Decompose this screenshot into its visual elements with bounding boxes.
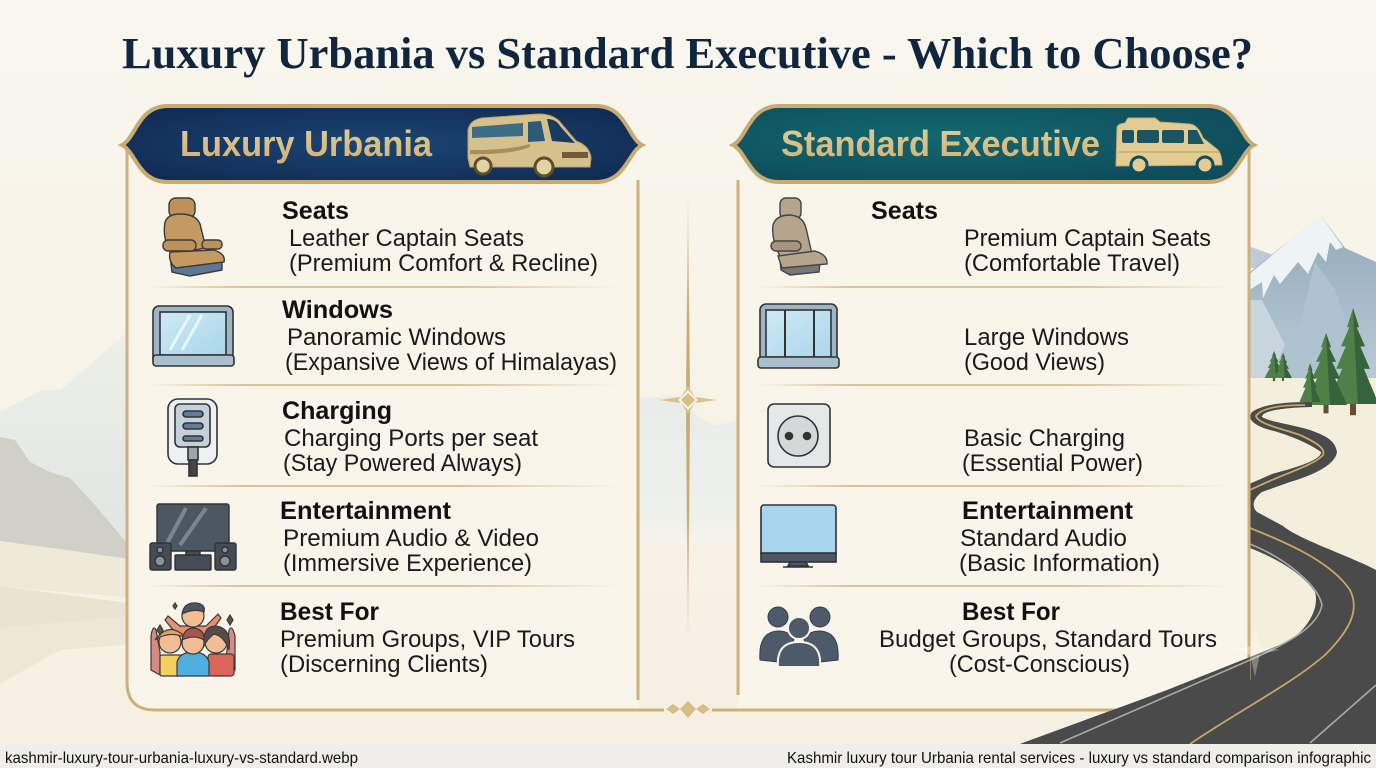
row text (964, 225, 1211, 277)
row text: (Immersive Experience) (283, 550, 532, 577)
row heading: Windows (282, 296, 393, 324)
panel: luxury urbania (122, 106, 664, 710)
row: entertainment (150, 497, 539, 577)
road sparkle (1232, 626, 1280, 677)
row text (280, 626, 575, 678)
row heading: Seats (871, 197, 938, 225)
row: seats (163, 197, 598, 277)
row text (959, 525, 1160, 577)
row text: (Good Views) (964, 349, 1105, 376)
row text: Budget Groups, Standard Tours (879, 626, 1217, 653)
row text: Basic Charging (964, 425, 1125, 452)
row heading: Entertainment (962, 497, 1134, 525)
panel body (738, 150, 1249, 710)
row: charging (168, 397, 538, 477)
panel body (127, 150, 638, 710)
row: windows (758, 304, 1129, 376)
icon: monitor (761, 505, 836, 567)
winding road (1020, 402, 1376, 744)
title: Luxury Urbania vs Standard Executive - Which to Choose? (122, 29, 1253, 78)
row text (289, 225, 598, 277)
banner (122, 106, 642, 182)
row: seats (771, 197, 1211, 277)
icon: happy group (151, 603, 235, 676)
icon: panoramic window (153, 306, 234, 366)
row text (283, 425, 538, 477)
row text: (Basic Information) (959, 550, 1160, 577)
row heading: Charging (282, 397, 392, 425)
row text: Leather Captain Seats (289, 225, 524, 252)
row text: (Cost-Conscious) (949, 651, 1130, 678)
road overlap over panel (1020, 657, 1250, 744)
bottom ornament (666, 701, 710, 718)
row: windows (153, 296, 617, 376)
row: entertainment (761, 497, 1160, 577)
banner title: Standard Executive (781, 123, 1100, 164)
row text: Premium Groups, VIP Tours (280, 626, 575, 653)
icon: wall socket (768, 404, 830, 467)
row text: Large Windows (964, 324, 1129, 351)
panel: standard executive (712, 106, 1254, 710)
icon: fabric seat (771, 198, 827, 275)
icon: luxury van (468, 114, 591, 176)
row text: Panoramic Windows (287, 324, 506, 351)
row text (285, 324, 617, 376)
row text: Charging Ports per seat (284, 425, 538, 452)
panel frame (127, 150, 664, 710)
row text: Premium Audio & Video (283, 525, 539, 552)
icon: standard van (1116, 118, 1222, 173)
row text (964, 324, 1129, 376)
centre divider with star (659, 175, 717, 718)
row heading: Entertainment (280, 497, 452, 525)
icon: large window (758, 304, 839, 368)
row heading: Best For (280, 598, 379, 626)
footer file name: kashmir-luxury-tour-urbania-luxury-vs-standard.webp (5, 750, 358, 767)
right mountain (1240, 217, 1376, 744)
row text: (Discerning Clients) (280, 651, 488, 678)
row text (283, 525, 539, 577)
row text: Premium Captain Seats (964, 225, 1211, 252)
row heading: Best For (962, 598, 1060, 626)
icon: people group (760, 607, 838, 667)
banner title: Luxury Urbania (180, 123, 433, 164)
row text: (Comfortable Travel) (964, 250, 1180, 277)
row text: (Stay Powered Always) (283, 450, 522, 477)
footer bar (0, 744, 1376, 768)
row text: Standard Audio (960, 525, 1127, 552)
row text: (Expansive Views of Himalayas) (285, 349, 617, 376)
row text: (Essential Power) (962, 450, 1143, 477)
banner (733, 106, 1254, 182)
row: best for (760, 598, 1217, 678)
left background mountains (0, 325, 135, 684)
panel frame (712, 150, 1249, 710)
star ornament (659, 386, 717, 414)
trees (1265, 308, 1376, 415)
row text (962, 425, 1143, 477)
icon: leather seat (163, 198, 224, 276)
row: charging (768, 404, 1143, 477)
icon: home theatre (150, 504, 236, 570)
row heading: Seats (282, 197, 349, 225)
row text (879, 626, 1217, 678)
centre pale mountains (638, 396, 738, 545)
row: best for (151, 598, 575, 678)
icon: charging ports (168, 399, 217, 476)
row text: (Premium Comfort & Recline) (289, 250, 598, 277)
